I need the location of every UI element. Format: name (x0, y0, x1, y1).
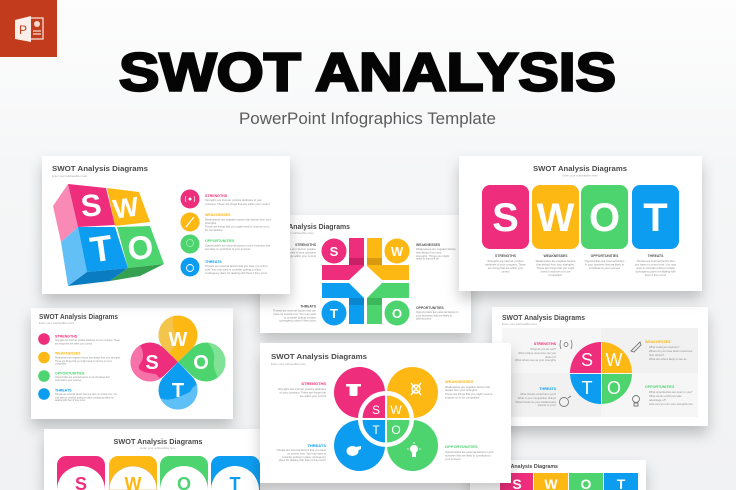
row: strengths: Strengths are internal, positive attributes of your (205, 198, 262, 202)
panel: four circle slide (260, 343, 511, 483)
shape: pink S arm (322, 238, 364, 280)
text: strengths (280, 243, 317, 258)
card: O opportunities: Opportunities are external factors (585, 259, 625, 263)
row: threats: may want to consider putting in place contingency plans for (55, 396, 114, 400)
panel: bottom right slide (470, 460, 646, 490)
chart: teardrop petals: S (145, 352, 159, 374)
text: opportunities: your business that are likely to (416, 314, 453, 318)
card: W weaknesses: that detract from your strengths. (536, 262, 575, 266)
text: opportunities (445, 444, 494, 461)
card: T (211, 456, 260, 490)
text: weaknesses: Weaknesses are negative factors (416, 247, 456, 251)
subtitle: PowerPoint Infographics Template (239, 110, 496, 128)
card: S strengths: STRENGTHS (495, 254, 517, 258)
shape: green O arm (367, 283, 410, 326)
text: threats: no control over. You may want to (287, 452, 327, 456)
row: strengths: company. These are things that are within your control (205, 202, 270, 206)
text: opportunities: OPPORTUNITIES (645, 385, 675, 389)
chart: SWOT quadrant circle (570, 342, 632, 404)
card: S strengths: S (492, 196, 519, 240)
text: weaknesses (416, 243, 456, 260)
panel: arrows and circles slide (260, 215, 471, 333)
card: T threats: THREATS (648, 254, 664, 258)
text: threats: to consider putting in place (284, 316, 316, 320)
chart: SWOT 3D cube (53, 184, 164, 286)
row: threats: contingency plans for dealing with them if they occur (205, 271, 267, 275)
text: strengths: draw on? (545, 355, 556, 359)
panel: arrows and circles slide: SWOT Analysis Diagrams (266, 224, 350, 231)
text: weaknesses: improve on to be competitive. (445, 396, 480, 400)
text: strengths (278, 381, 327, 398)
text: opportunities: What trends could you take (649, 394, 682, 398)
row: weaknesses: Weaknesses are negative factors that detract from your (205, 218, 271, 222)
row: opportunities: Opportunities are external factors in your business that (205, 244, 270, 248)
row: weaknesses (38, 352, 121, 366)
panel: SWOT cards slide (459, 156, 702, 291)
row: strengths: STRENGTHS (55, 334, 78, 338)
chart: teardrop petals: T (172, 380, 184, 402)
shape: green O arm: O (392, 306, 402, 321)
chart: SWOT quadrant circle: O (607, 378, 621, 398)
card: W weaknesses (532, 185, 579, 277)
text: opportunities: OPPORTUNITIES (445, 444, 478, 449)
text: strengths: What others see as your strengths (515, 358, 557, 362)
text: opportunities: Opportunities are external factors in (416, 310, 459, 314)
row: strengths: STRENGTHS (205, 194, 228, 198)
panel: circle quadrant slide (492, 307, 708, 426)
chart: four circle SWOT: T (372, 423, 380, 437)
text: strengths: STRENGTHS (295, 243, 317, 247)
chart: SWOT 3D cube: T (88, 227, 115, 270)
row: weaknesses: These are things that you might need to improve on to be (55, 360, 113, 363)
shape: blue T arm (322, 283, 364, 326)
row: strengths (180, 190, 270, 208)
text: weaknesses: WEAKNESSES (445, 379, 474, 384)
row: opportunities: are likely to contribute to your success (205, 247, 251, 251)
row: weaknesses: be competitive. (205, 228, 223, 232)
text: weaknesses (645, 340, 693, 361)
text: threats: plans for dealing with them if they occur (279, 458, 326, 462)
text: opportunities: What opportunities are open to you? (649, 390, 693, 394)
panel: arrows and circles slide: Enter your subheadline here (279, 231, 314, 235)
card: T threats (632, 185, 679, 277)
row: opportunities (180, 234, 270, 254)
text: weaknesses: detract from your strengths. (445, 388, 478, 392)
panel: circled letters slide: Enter your subheadline here (140, 446, 176, 450)
text: threats (276, 443, 327, 462)
row: strengths (38, 333, 121, 346)
chart: SWOT 3D cube: O (125, 228, 156, 268)
text: threats: Threats are external factors that you (273, 308, 317, 312)
text: opportunities: add success (416, 316, 432, 320)
icon: outline rocket (631, 342, 641, 352)
panel: petal slide: Enter your subheadline here (39, 321, 75, 325)
text: weaknesses: need to improve on (416, 256, 440, 260)
panel: circled letters slide: SWOT Analysis Diagrams (114, 437, 202, 446)
panel: SWOT cards slide: SWOT Analysis Diagrams (533, 164, 627, 173)
text: threats: What threats could harm you? (520, 392, 556, 396)
bar: SWOT colour blocks (500, 473, 638, 490)
text: threats: What threats do your weaknesses (516, 400, 557, 404)
row: threats (180, 258, 268, 276)
text: weaknesses: What could you improve? (649, 345, 680, 349)
chart: four circle SWOT (334, 367, 438, 471)
panel: bottom right slide: SWOT Analysis Diagrams (493, 464, 558, 470)
text: threats: THREATS (300, 304, 317, 308)
panel: four circle slide: Enter your subheadline here (271, 362, 307, 366)
text: weaknesses: These are things that you might need to (445, 392, 493, 396)
chart: teardrop petals: W (169, 329, 188, 351)
card: T threats: them if they occur (645, 273, 666, 277)
text: weaknesses: What are others likely to see as (649, 357, 687, 361)
row: threats: THREATS (205, 260, 222, 264)
text: threats: THREATS (539, 387, 557, 391)
card: T threats: T (643, 196, 668, 240)
text: opportunities: How can you turn your strengths into (649, 402, 693, 406)
card: O (160, 456, 208, 490)
panel: four circle slide: SWOT Analysis Diagrams (271, 352, 367, 361)
text: weaknesses: Where do you have fewer resources (649, 349, 693, 353)
logo: PowerPoint badge: P (19, 23, 27, 37)
text: strengths (515, 342, 557, 362)
chart: SWOT 3D cube: S (79, 187, 103, 224)
shape: yellow W arm (367, 238, 410, 280)
card: T threats: Threats are external factors that (636, 259, 675, 263)
card: S strengths: control (501, 270, 510, 274)
card: W weaknesses: need to improve on to be (541, 270, 571, 274)
panel: 3D cube slide (42, 156, 290, 294)
text: opportunities: Opportunities are external factors in your (445, 450, 494, 454)
panel: 3D cube slide: Enter your subheadline here (52, 174, 88, 178)
text: opportunities: OPPORTUNITIES (416, 306, 444, 310)
text: opportunities: advantage of? (649, 398, 667, 402)
text: strengths: things within your control (286, 254, 316, 258)
card: O opportunities: O (589, 196, 620, 240)
text: weaknesses: WEAKNESSES (645, 340, 671, 344)
shape: pink S arm: S (330, 244, 339, 259)
chart: SWOT quadrant circle: W (606, 350, 622, 370)
shape: blue T arm: T (330, 306, 338, 321)
panel: SWOT cards slide: Enter your subheadline here (562, 174, 598, 178)
row: strengths: Strengths are internal, positive attributes of your company. These (55, 339, 121, 342)
row: threats: Threats are external factors that you have no control (205, 264, 268, 268)
text: opportunities: business that are likely to contribute to (445, 454, 491, 458)
text: threats: expose to you? (538, 403, 556, 407)
text: threats (516, 387, 557, 407)
text: opportunities (416, 306, 459, 320)
card: W weaknesses: W (537, 196, 575, 240)
text: threats: have no control over. You may want (274, 312, 316, 316)
card: S (57, 456, 105, 490)
card: S strengths: Strengths are internal, positive (487, 259, 524, 263)
text: strengths: STRENGTHS (534, 342, 557, 346)
text: opportunities (645, 385, 693, 406)
row: weaknesses: WEAKNESSES (55, 352, 81, 356)
text: strengths: What unique resources can you (518, 351, 557, 355)
logo: PowerPoint badge (0, 0, 57, 57)
card: O opportunities: in your business that are likely to (585, 262, 624, 266)
row: opportunities (38, 370, 110, 382)
row: opportunities: could add to your success. (55, 379, 82, 382)
card: W weaknesses: WEAKNESSES (543, 254, 568, 258)
row: opportunities: Opportunities are external factors in your business that (55, 376, 110, 379)
chart: four circle SWOT: O (391, 423, 401, 437)
text: strengths: Strengths are internal, positive attributes (278, 387, 327, 391)
text: weaknesses: Weaknesses are negative factors that (445, 385, 490, 389)
card: W weaknesses: These are things that you might (537, 266, 575, 270)
card: W weaknesses: competitive. (548, 273, 563, 277)
card: S strengths (482, 185, 529, 274)
panel: petal slide (31, 308, 233, 419)
panel: circle quadrant slide: Enter your subheadline here (502, 322, 538, 326)
shape: yellow W arm: W (391, 244, 404, 259)
chart: SWOT quadrant circle: S (581, 350, 593, 370)
text: strengths: are within your control (300, 394, 326, 398)
row: threats: over. You may want to consider putting in place (205, 268, 262, 272)
card: T threats: you have no control over. You may (635, 262, 677, 266)
icon: rocket (411, 383, 421, 395)
chart: teardrop petals (130, 316, 226, 410)
icon: light bulb (407, 442, 421, 457)
row: strengths: are things that are within your control. (55, 342, 93, 346)
card: W (109, 456, 157, 490)
icon: bomb (346, 446, 361, 456)
text: strengths: of your company. These are things that (280, 390, 326, 394)
panel: petal slide: SWOT Analysis Diagrams (39, 314, 118, 321)
text: strengths: STRENGTHS (301, 381, 326, 386)
panel: circle quadrant slide: SWOT Analysis Diagrams (502, 313, 585, 322)
text: strengths: attributes of your company (284, 250, 317, 254)
row: weaknesses: competitive. (55, 362, 67, 366)
row: threats (38, 388, 118, 402)
text: threats: What is your competition doing? (518, 396, 556, 400)
chart: four circle SWOT: S (372, 403, 380, 417)
icon: outline antenna (560, 340, 572, 349)
row: opportunities: OPPORTUNITIES (55, 372, 85, 376)
card: S strengths: attributes of your company. These (485, 262, 526, 266)
text: weaknesses: WEAKNESSES (416, 243, 441, 247)
title: SWOT ANALYSIS (119, 43, 616, 103)
text: strengths: What do you do well? (530, 347, 556, 351)
row: opportunities: OPPORTUNITIES (205, 239, 235, 243)
row: weaknesses (180, 212, 271, 232)
row: weaknesses: WEAKNESSES (205, 213, 231, 217)
panel: 3D cube slide: SWOT Analysis Diagrams (52, 164, 148, 173)
text: weaknesses: that detract from your (416, 250, 442, 254)
icon: outline bulb (632, 396, 640, 406)
card: S strengths: are things that are within your (488, 266, 523, 270)
text: threats: THREATS (307, 443, 326, 448)
card: T threats: want to consider putting in place (636, 266, 675, 270)
card: O opportunities: OPPORTUNITIES (591, 254, 619, 258)
row: threats: Threats are external factors that you have no control over. You (55, 393, 118, 396)
row: weaknesses: Weaknesses are negative factors that detract from your strengths. (55, 356, 121, 360)
text: opportunities: your success (445, 457, 461, 461)
card: T threats: contingency plans for dealing with (635, 270, 676, 274)
chart: SWOT 3D cube: W (111, 191, 141, 225)
text: strengths: Strengths are internal, positive (280, 247, 316, 251)
row: threats: THREATS (55, 388, 72, 392)
chart: SWOT quadrant circle: T (582, 378, 592, 398)
row: weaknesses: strengths. (205, 221, 217, 225)
row: weaknesses: These are things that you might need to improve on to (205, 224, 270, 228)
text: weaknesses: than others? (649, 353, 664, 357)
card: W weaknesses: Weaknesses are negative factors (536, 259, 576, 263)
text: threats (273, 304, 317, 322)
chart: teardrop petals: O (193, 352, 209, 374)
text: threats: Threats are external factors that you have (276, 448, 327, 452)
chart: four circle SWOT: W (390, 403, 402, 417)
panel: circled letters slide (44, 429, 260, 490)
text: threats: consider putting in place contingency (282, 455, 327, 459)
text: weaknesses: strengths. Things you might (416, 254, 449, 258)
text: weaknesses (445, 379, 493, 400)
card: O opportunities (581, 185, 628, 270)
row: threats: dealing with them if they occur. (55, 399, 86, 402)
card: O opportunities: contribute to your success (589, 266, 621, 270)
text: threats: contingency plans if they occur (279, 318, 316, 322)
icon: raised fist (346, 384, 361, 396)
icon: outline bomb (560, 396, 571, 406)
